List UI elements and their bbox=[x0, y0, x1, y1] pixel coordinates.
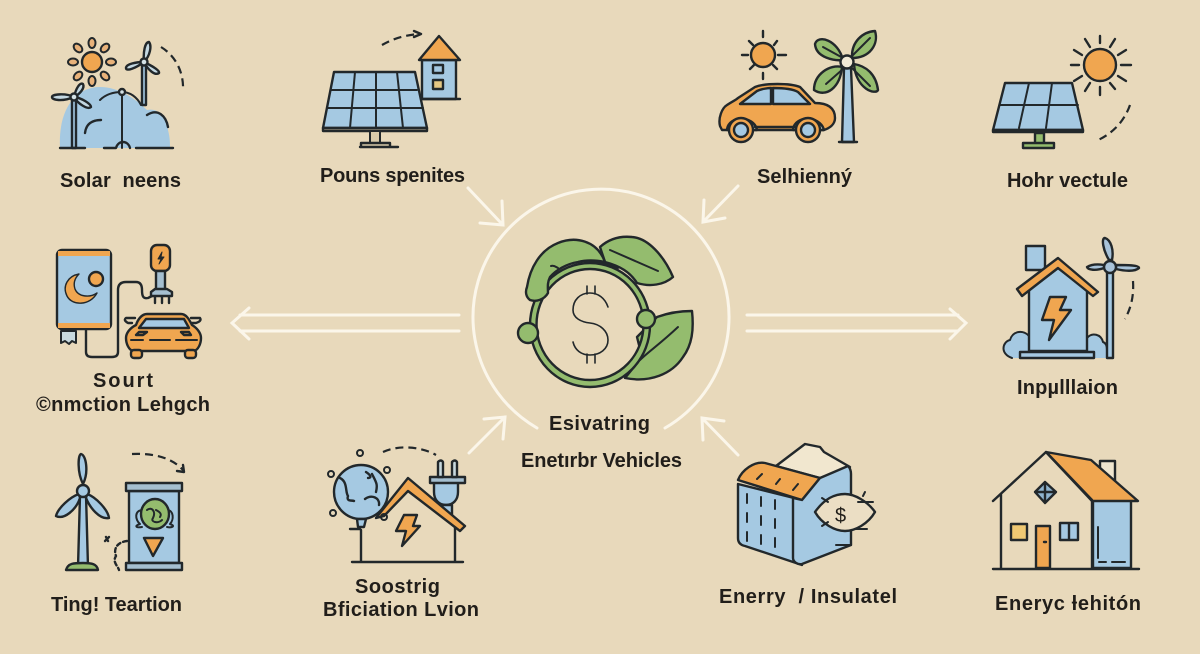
label: Solar neens bbox=[60, 170, 181, 192]
panel: insulated building bbox=[719, 444, 897, 608]
arrow: left double arrow bbox=[232, 308, 459, 339]
icon: dashed arrow bbox=[382, 31, 421, 45]
icon: door bbox=[1036, 526, 1050, 568]
icon: back roof bbox=[776, 444, 850, 478]
icon: small circles bbox=[328, 450, 390, 520]
arrow: bottom-left bbox=[469, 417, 505, 453]
icon: top leaf bbox=[600, 237, 673, 285]
icon: hill details bbox=[60, 112, 173, 148]
label: Ting! Teartion bbox=[51, 594, 182, 616]
icon: dashed arc bbox=[161, 47, 183, 91]
label: Bficiation Lvion bbox=[323, 599, 479, 621]
icon: small house bbox=[419, 36, 460, 99]
panel: phone charging car bbox=[36, 245, 210, 416]
icon: bolt bbox=[396, 515, 420, 546]
icon: house roof bbox=[376, 478, 465, 531]
icon: charging plug bbox=[151, 245, 172, 303]
open ring bbox=[473, 189, 729, 428]
icon: building front bbox=[738, 484, 802, 565]
icon: small dashes bbox=[115, 541, 127, 570]
label: Eneryc ƚehitón bbox=[995, 593, 1141, 615]
icon: roof dashes bbox=[757, 474, 798, 490]
icon: dollar eye bbox=[815, 492, 875, 545]
label: Enetırbr Vehicles bbox=[521, 450, 682, 472]
icon: solar panel bbox=[993, 83, 1083, 148]
icon: spark bbox=[105, 537, 109, 541]
icon: front dashes bbox=[747, 494, 775, 550]
center: sustainable finance hub bbox=[473, 189, 729, 472]
icon: dashed arc bbox=[383, 447, 436, 455]
arrow: top-right bbox=[703, 186, 738, 222]
icon: sun bbox=[68, 38, 116, 86]
panel: house with wind turbine bbox=[1004, 238, 1139, 399]
arrow: top-left bbox=[468, 188, 503, 225]
icon: sun with rays bbox=[1071, 36, 1131, 95]
label: Sourt bbox=[93, 370, 153, 392]
label bbox=[521, 413, 682, 472]
icon: blue window bbox=[1060, 523, 1078, 540]
panel: solar and wind hills bbox=[52, 38, 183, 192]
icon: chimney bbox=[1100, 461, 1115, 485]
icon: turbine bbox=[1087, 238, 1139, 358]
icon: left turbine bbox=[52, 84, 91, 148]
icon: door handle bbox=[1044, 541, 1046, 543]
panel: solar panel and sun bbox=[993, 36, 1131, 192]
icon: annex details bbox=[1098, 527, 1125, 562]
icon: solar panel bbox=[323, 72, 427, 147]
label: Soostrig bbox=[355, 576, 440, 598]
icon: dashed arrow bbox=[132, 454, 184, 472]
icon: house bbox=[1004, 246, 1111, 358]
icon: house walls bbox=[352, 527, 463, 562]
icon: blue annex bbox=[1093, 500, 1131, 568]
arrow: bottom-right bbox=[702, 418, 738, 455]
icon: diamond window bbox=[1035, 482, 1056, 503]
label: Selhienný bbox=[757, 166, 853, 188]
icon: yellow window bbox=[1011, 524, 1027, 540]
icon: dashed arc bbox=[1125, 281, 1133, 319]
icon: ring nodes bbox=[518, 310, 655, 343]
label: Enerry / Insulatel bbox=[719, 586, 897, 608]
icon: right turbine bbox=[126, 42, 159, 105]
icon: dollar eye: $ bbox=[835, 505, 846, 527]
icon: house outline bbox=[993, 452, 1092, 568]
panel: solar panel and house bbox=[320, 31, 465, 187]
arrow: right double arrow bbox=[747, 309, 966, 339]
label bbox=[36, 370, 210, 416]
icon: leaf turbine bbox=[814, 31, 878, 142]
icon: green ring bbox=[530, 263, 650, 387]
icon: orange roof bbox=[1046, 452, 1138, 501]
label: ©nmction Lehgch bbox=[36, 394, 210, 416]
icon: car bbox=[719, 84, 835, 142]
icon: turbine bbox=[56, 454, 109, 570]
panel: house bbox=[993, 452, 1141, 615]
icon: dollar sign bbox=[573, 286, 608, 363]
panel: turbine and canister bbox=[51, 454, 184, 616]
icon: top-left leaf bbox=[526, 240, 618, 301]
label: Hohr vectule bbox=[1007, 170, 1128, 192]
icon: hills bbox=[60, 87, 170, 148]
icon: orange top bbox=[738, 463, 820, 500]
icon: right leaf bbox=[625, 311, 693, 379]
icon: cable bbox=[86, 282, 152, 357]
icon: front-view car bbox=[125, 314, 201, 358]
icon: sun with rays bbox=[742, 31, 786, 79]
label: Pouns spenites bbox=[320, 165, 465, 187]
panel: car and leaf turbine bbox=[719, 31, 878, 188]
icon: canister bbox=[126, 483, 182, 570]
icon: dashed arc bbox=[1096, 105, 1130, 141]
icon: plug bbox=[430, 460, 465, 515]
label: Inpµlllaion bbox=[1017, 377, 1118, 399]
label: Esivatring bbox=[549, 413, 650, 435]
icon: middle turbine bbox=[100, 89, 141, 148]
panel: globe, house and plug bbox=[323, 447, 479, 621]
icon: building side bbox=[793, 466, 851, 564]
icon: globe bbox=[334, 465, 388, 529]
icon: ground bbox=[993, 568, 1139, 570]
icon: battery device bbox=[57, 250, 111, 344]
label bbox=[323, 576, 479, 621]
